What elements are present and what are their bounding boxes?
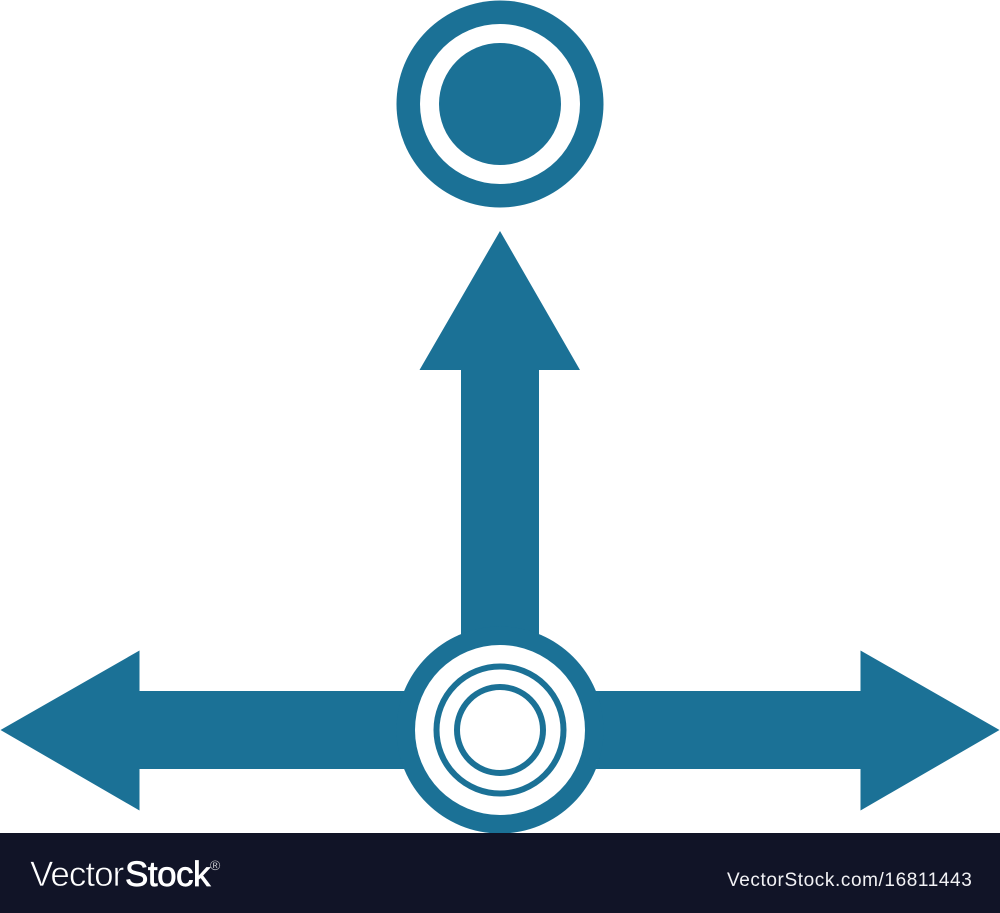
footer logo: Stock [125,855,211,894]
footer bar [0,833,1000,913]
arrow: right [580,650,1000,810]
arrow: left [0,650,420,810]
footer image id: VectorStock.com/16811443 [727,870,972,891]
arrow: up [420,231,580,650]
footer logo [30,855,221,894]
footer logo: Vector [30,855,125,894]
icon: bottom hub with concentric rings [396,626,604,834]
icon: top target circle [396,0,604,208]
footer logo: ® [210,857,221,873]
